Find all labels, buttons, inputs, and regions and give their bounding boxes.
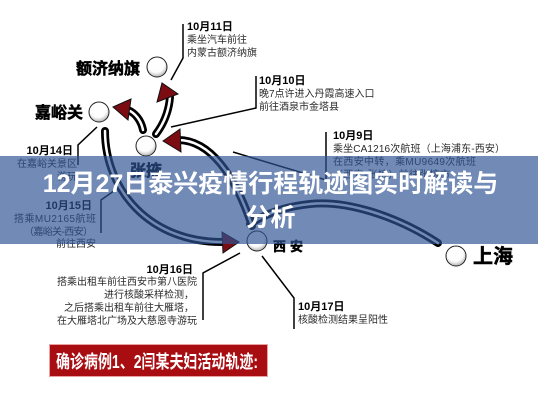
text: Oct 9: （西安-张掖）前往张掖市 xyxy=(333,168,450,181)
text: Oct 14 xyxy=(17,144,77,183)
title: 分析 xyxy=(245,204,296,232)
route: Zhangye to Jiayuguan xyxy=(128,110,143,130)
text: Oct 16: 在大雁塔北广场及大慈恩寺游玩 xyxy=(57,314,197,327)
overlay band xyxy=(0,156,538,244)
title xyxy=(43,170,498,232)
route: Shanghai to Xi'an to Zhangye xyxy=(178,140,438,243)
text: Oct 15: （嘉峪关-西安） xyxy=(24,225,93,238)
text: Oct 9: 10月9日 xyxy=(333,129,373,142)
banner: case title xyxy=(50,344,268,376)
arrow: to Ejin Banner xyxy=(157,83,178,102)
text: Oct 17: 核酸检测结果呈阳性 xyxy=(298,313,388,326)
arrow: to Xi'an xyxy=(222,232,239,253)
text: Oct 14: 游玩 xyxy=(57,170,77,183)
text: Oct 11: 乘坐汽车前往 xyxy=(187,33,247,46)
text: Oct 15 xyxy=(14,199,96,250)
text: Oct 16: 10月16日 xyxy=(147,263,193,276)
node: Zhangye xyxy=(130,136,162,180)
arrow: to Zhangye xyxy=(163,129,181,152)
node: Jiayuguan xyxy=(35,102,109,122)
node: Shanghai xyxy=(446,245,513,268)
text: Oct 9 xyxy=(333,129,505,181)
node: Xi'an: 西安 xyxy=(273,239,307,254)
text: Oct 16: 搭乘出租车前往西安市第八医院 xyxy=(57,275,197,288)
text: Oct 11 xyxy=(187,20,257,59)
text: Oct 10: 10月10日 xyxy=(259,74,305,87)
text: Oct 16 xyxy=(57,263,197,327)
text: Oct 14: 在嘉峪关景区 xyxy=(17,157,77,170)
node: Shanghai: 上海 xyxy=(473,245,513,268)
text: Oct 10: 前往酒泉市金塔县 xyxy=(259,100,339,113)
node: Xi'an xyxy=(247,231,307,254)
text: Oct 11: 内蒙古额济纳旗 xyxy=(187,46,257,59)
text: Oct 15: 10月15日 xyxy=(46,199,92,212)
route: Zhangye to Ejin Banner xyxy=(156,97,170,134)
route: Jiayuguan to Xi'an xyxy=(105,131,224,242)
text: Oct 14: 10月14日 xyxy=(27,144,73,157)
node: Ejin Banner xyxy=(76,57,167,78)
text: Oct 15: 前往西安 xyxy=(56,237,96,250)
node: Jiayuguan: 嘉峪关 xyxy=(35,103,83,122)
text: Oct 16: 之后搭乘出租车前往大雁塔， xyxy=(64,301,194,314)
text: Oct 11: 10月11日 xyxy=(187,20,233,33)
text: Oct 9: 在西安中转，乘MU9649次航班 xyxy=(333,155,476,168)
text: Oct 17 xyxy=(298,300,388,326)
text: Oct 17: 10月17日 xyxy=(298,300,344,313)
text: Oct 15: 搭乘MU2165航班 xyxy=(14,212,96,225)
arrow: to Jiayuguan xyxy=(113,99,131,120)
text: Oct 10 xyxy=(259,74,375,113)
text: Oct 9: 乘坐CA1216次航班（上海浦东-西安） xyxy=(333,142,505,155)
text: Oct 10: 晚7点许进入丹霞高速入口 xyxy=(259,87,375,100)
node: Zhangye: 张掖 xyxy=(130,161,162,180)
title: 12月27日泰兴疫情行程轨迹图实时解读与 xyxy=(43,170,498,198)
leader lines xyxy=(78,24,326,329)
text: Oct 16: 进行核酸采样检测， xyxy=(104,288,194,301)
banner: case title: 确诊病例1、2闫某夫妇活动轨迹: xyxy=(56,351,258,372)
node: Ejin Banner: 额济纳旗 xyxy=(76,59,140,78)
